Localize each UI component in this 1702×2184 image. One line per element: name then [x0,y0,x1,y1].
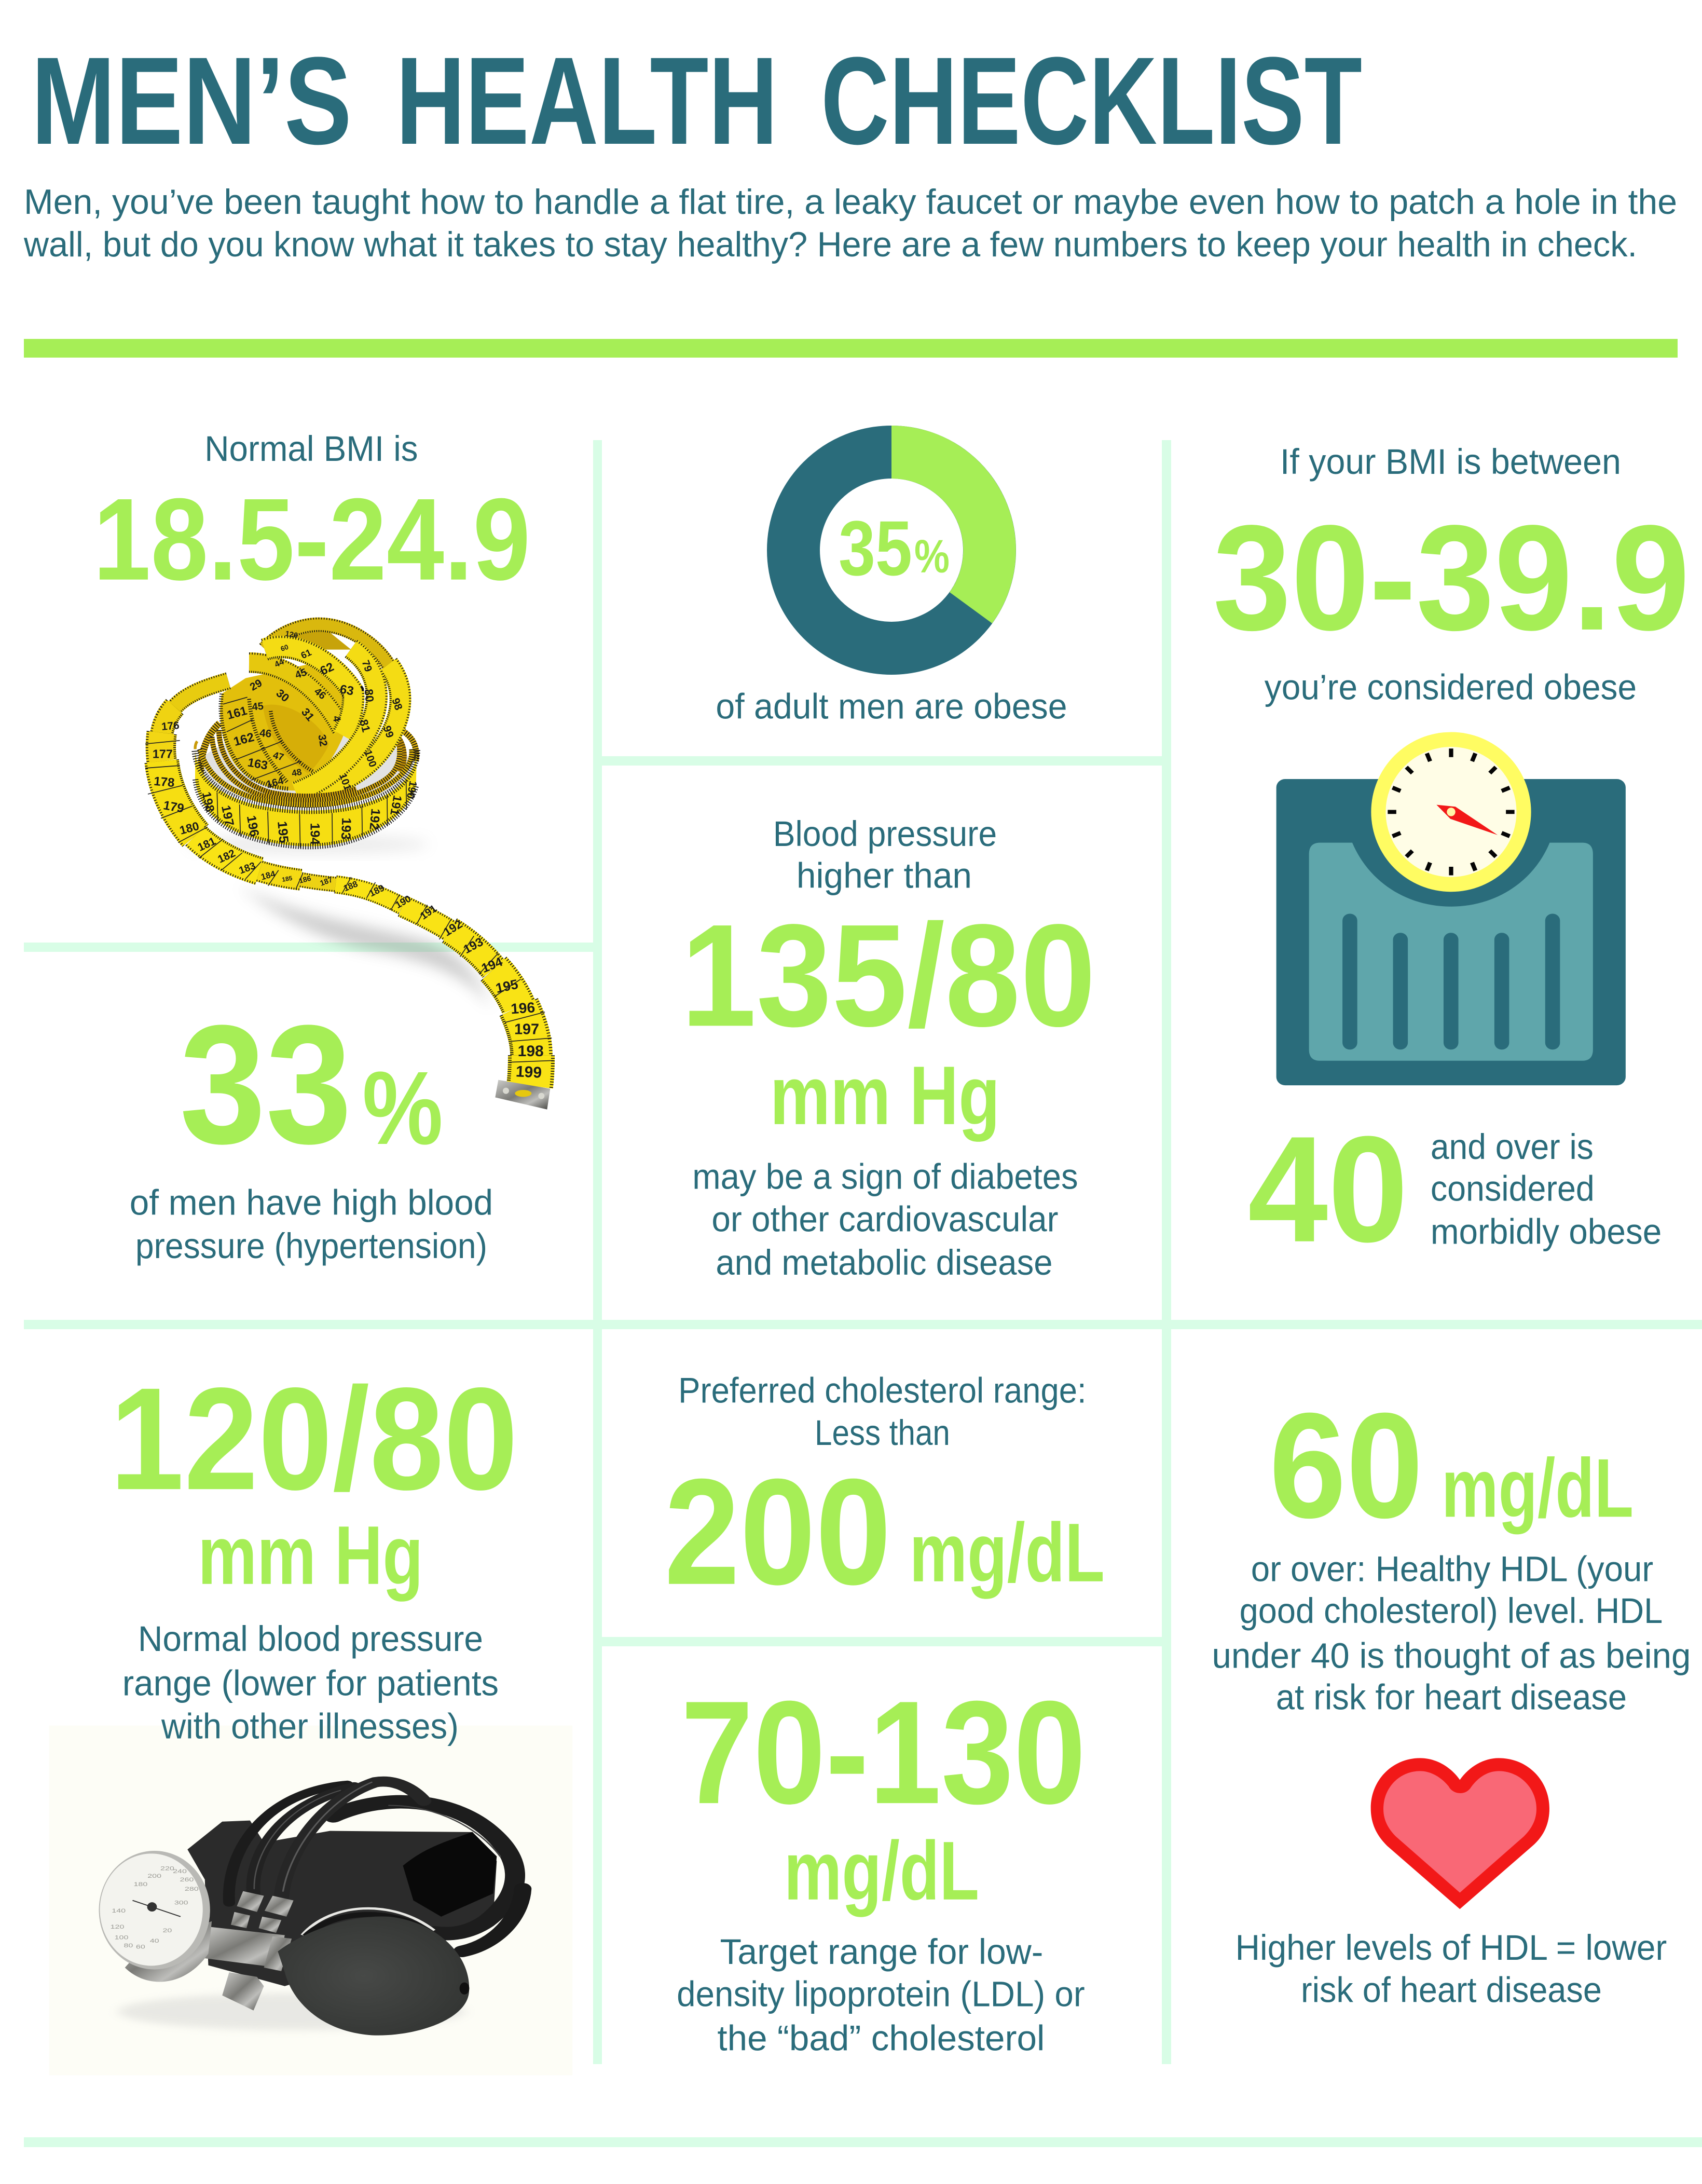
tape numbers: 198 [200,790,217,813]
panel: HDL: or over: Healthy HDL (your [1251,1550,1653,1589]
tape numbers: 161 [225,704,249,722]
photo: blood pressure cuff: 280 [185,1886,199,1892]
panel: morbidly obese [1248,1105,1662,1274]
intro text: Men, you’ve been taught how to handle a flat tire, a leaky faucet or maybe even how to patch a hole in the [24,182,1677,222]
inner rims of the coil [200,730,412,805]
tape numbers: 183 [238,861,257,877]
panel: LDL target [677,1670,1086,2058]
tape numbers: 179 [162,798,185,816]
panel: obese BMI: you’re considered obese [1265,667,1637,707]
panel: preferred cholesterol: Preferred cholesterol range: [678,1371,1087,1411]
panel: HDL [1212,1382,1691,1717]
photo: blood pressure cuff [49,1726,572,2076]
photo: blood pressure cuff: 40 [150,1937,159,1944]
icon: tape measure [145,625,554,1110]
band 44 to 47 [249,663,342,730]
scale dial ticks [1388,748,1515,876]
panel: high blood pressure [681,814,1096,1282]
panel: normal blood pressure: range (lower for patients [122,1663,499,1703]
icon: heart [1371,1758,1549,1909]
panel: normal BMI: 18.5-24.9 [93,474,530,605]
tape numbers: 45 [252,701,264,713]
panel: LDL target: density lipoprotein (LDL) or [677,1974,1085,2014]
panel: normal BMI: Normal BMI is [204,429,418,469]
panel: HDL: 60 [1269,1382,1423,1549]
tape numbers: 190 [404,780,419,800]
tape numbers: 48 [291,767,303,779]
tape numbers: 188 [342,879,359,893]
donut chart: 35 percent [793,426,1016,648]
tape numbers: 126 [284,630,298,640]
tape numbers: 193 [461,935,485,956]
tape numbers: 29 [248,677,264,693]
band 60 to 63 [265,647,353,735]
photo: blood pressure cuff: 240 [173,1868,187,1874]
tape numbers: 47 [272,749,285,762]
tape numbers: 163 [246,755,269,772]
icon: bathroom scale [1276,732,1626,1085]
back rims of the coil [195,723,416,785]
tape numbers: 176 [161,719,180,733]
panel: 33 percent hypertension: 33 [180,990,352,1179]
intro text [23,182,1677,264]
top back band [265,625,389,666]
panel: normal blood pressure: mm Hg [198,1509,423,1602]
title: CHECKLIST [821,31,1362,170]
tape numbers: 45 [294,666,308,681]
band 79 to 81 [296,649,377,793]
donut chart: 35 percent: 35 [839,504,912,592]
tape numbers: 100 [362,748,378,769]
tape numbers: 181 [196,835,218,854]
title: MEN’S [31,31,352,170]
panel: normal blood pressure [110,1357,518,1746]
panel: normal BMI [93,429,530,605]
panel: high blood pressure: higher than [797,856,972,895]
tape numbers: 32 [315,733,330,747]
title: HEALTH [396,31,778,170]
green header divider [24,339,1678,358]
donut chart: 35 percent: % [914,531,950,583]
tape numbers: 184 [260,869,277,882]
panel: preferred cholesterol: mg/dL [910,1507,1105,1600]
tape numbers: 46 [312,686,328,702]
photo: blood pressure cuff: 260 [180,1877,194,1882]
photo: blood pressure cuff: 100 [115,1934,129,1941]
panel: 33 percent hypertension [130,990,493,1266]
tape numbers: 191 [418,903,439,922]
tape numbers: 61 [299,647,313,661]
panel: high blood pressure: 135/80 [681,894,1096,1057]
panel: HDL note [1236,1928,1667,2010]
panel: preferred cholesterol: Less than [815,1413,950,1453]
tape numbers: 196 [510,999,536,1017]
tape numbers: 101 [337,772,353,792]
panel: normal blood pressure: 120/80 [110,1357,518,1520]
panel: HDL: good cholesterol) level. HDL [1240,1591,1663,1631]
panel: morbidly obese: 40 [1248,1105,1408,1274]
panel: preferred cholesterol [664,1371,1105,1616]
intro text: wall, but do you know what it takes to stay healthy? Here are a few numbers to keep your health in check. [23,225,1637,264]
tape numbers: 180 [178,819,200,837]
tape numbers: 193 [338,817,353,840]
tape numbers: 30 [274,687,292,704]
panel: LDL target: mg/dL [784,1825,979,1918]
tape numbers: 194 [308,823,322,845]
photo: blood pressure cuff: 120 [111,1924,125,1930]
tape tail [161,681,531,1086]
tape numbers: 198 [518,1043,544,1060]
tape numbers: 190 [393,893,413,910]
front coil band [195,749,417,848]
tape numbers: 63 [339,682,355,699]
tape numbers: 60 [280,643,290,653]
photo: blood pressure cuff: 20 [162,1928,172,1934]
tape numbers: 189 [367,882,386,899]
tape numbers: 182 [216,847,237,866]
panel: 33 percent hypertension: % [362,1049,443,1166]
tape numbers: 187 [319,876,334,888]
photo: blood pressure cuff: 180 [133,1881,148,1887]
tape numbers: 99 [381,724,396,740]
panel: 33 percent hypertension: pressure (hypertension) [135,1226,487,1266]
panel: obese BMI: If your BMI is between [1280,442,1621,482]
panel: high blood pressure: Blood pressure [773,814,997,854]
tape numbers: 80 [362,688,377,703]
panel: LDL target: the “bad” cholesterol [717,2019,1045,2058]
panel: HDL: at risk for heart disease [1276,1678,1627,1717]
tape cross lines [145,741,554,1062]
panel: HDL note: Higher levels of HDL = lower [1236,1928,1667,1968]
panel: high blood pressure: and metabolic disease [716,1243,1052,1282]
grid lines [24,440,1702,2147]
tape numbers: 81 [357,718,373,733]
panel: high blood pressure: may be a sign of diabetes [692,1157,1078,1196]
tape numbers: 195 [274,821,291,844]
title [31,31,1362,170]
tape numbers: 177 [153,747,173,761]
photo: blood pressure cuff: 140 [112,1907,126,1914]
panel: HDL: under 40 is thought of as being [1212,1636,1691,1675]
donut caption: of adult men are obese [716,687,1067,726]
tape numbers: 197 [514,1021,539,1038]
tape numbers: 192 [441,917,465,939]
panel: preferred cholesterol: 200 [664,1448,891,1616]
panel: normal blood pressure: with other illnesses) [161,1707,459,1746]
tape numbers: 162 [232,730,256,749]
panel: LDL target: Target range for low- [720,1932,1043,1972]
tape numbers: 191 [388,794,405,816]
tape numbers: 199 [515,1063,542,1082]
panel: morbidly obese: considered [1431,1169,1595,1208]
tape numbers: 31 [299,705,317,724]
photo: blood pressure cuff: 300 [174,1900,188,1906]
tape numbers: 4 [331,715,342,722]
tape numbers: 192 [366,808,382,830]
tape numbers: 79 [360,659,374,674]
panel: normal blood pressure: Normal blood pressure [138,1619,483,1659]
photo: blood pressure cuff: 200 [147,1873,162,1879]
ball interior [220,664,356,790]
panel: HDL: mg/dL [1442,1442,1634,1535]
tape numbers: 197 [218,804,237,827]
panel: morbidly obese: and over is [1431,1127,1594,1167]
tape numbers: 196 [244,814,262,838]
tape numbers: 185 [281,875,293,883]
tape numbers: 44 [273,658,285,670]
photo: blood pressure cuff: 220 [160,1865,174,1872]
tape numbers: 62 [318,660,336,678]
tape numbers: 164 [265,775,285,790]
panel: high blood pressure: mm Hg [770,1049,1000,1142]
tape numbers: 195 [494,976,519,996]
gauge dial [99,1851,210,1970]
panel: HDL note: risk of heart disease [1301,1970,1602,2010]
tape numbers: 186 [298,874,312,885]
tape numbers: 46 [259,727,272,740]
tape numbers: 178 [153,774,175,790]
scale needle [1436,805,1498,835]
panel: LDL target: 70-130 [681,1670,1086,1834]
photo: blood pressure cuff: 80 [123,1942,133,1948]
tape numbers: 98 [389,697,405,712]
bulb [302,1908,434,1935]
panel: 33 percent hypertension: of men have high blood [130,1183,493,1222]
panel: morbidly obese: morbidly obese [1431,1212,1662,1252]
panel: obese BMI [1213,442,1690,707]
band 98 to 101 [301,664,401,794]
photo: blood pressure cuff: 60 [136,1944,145,1950]
panel: high blood pressure: or other cardiovascular [711,1200,1059,1239]
tape numbers [153,630,544,1082]
tape numbers: 194 [479,955,505,976]
tape metal end cap [495,1080,550,1110]
